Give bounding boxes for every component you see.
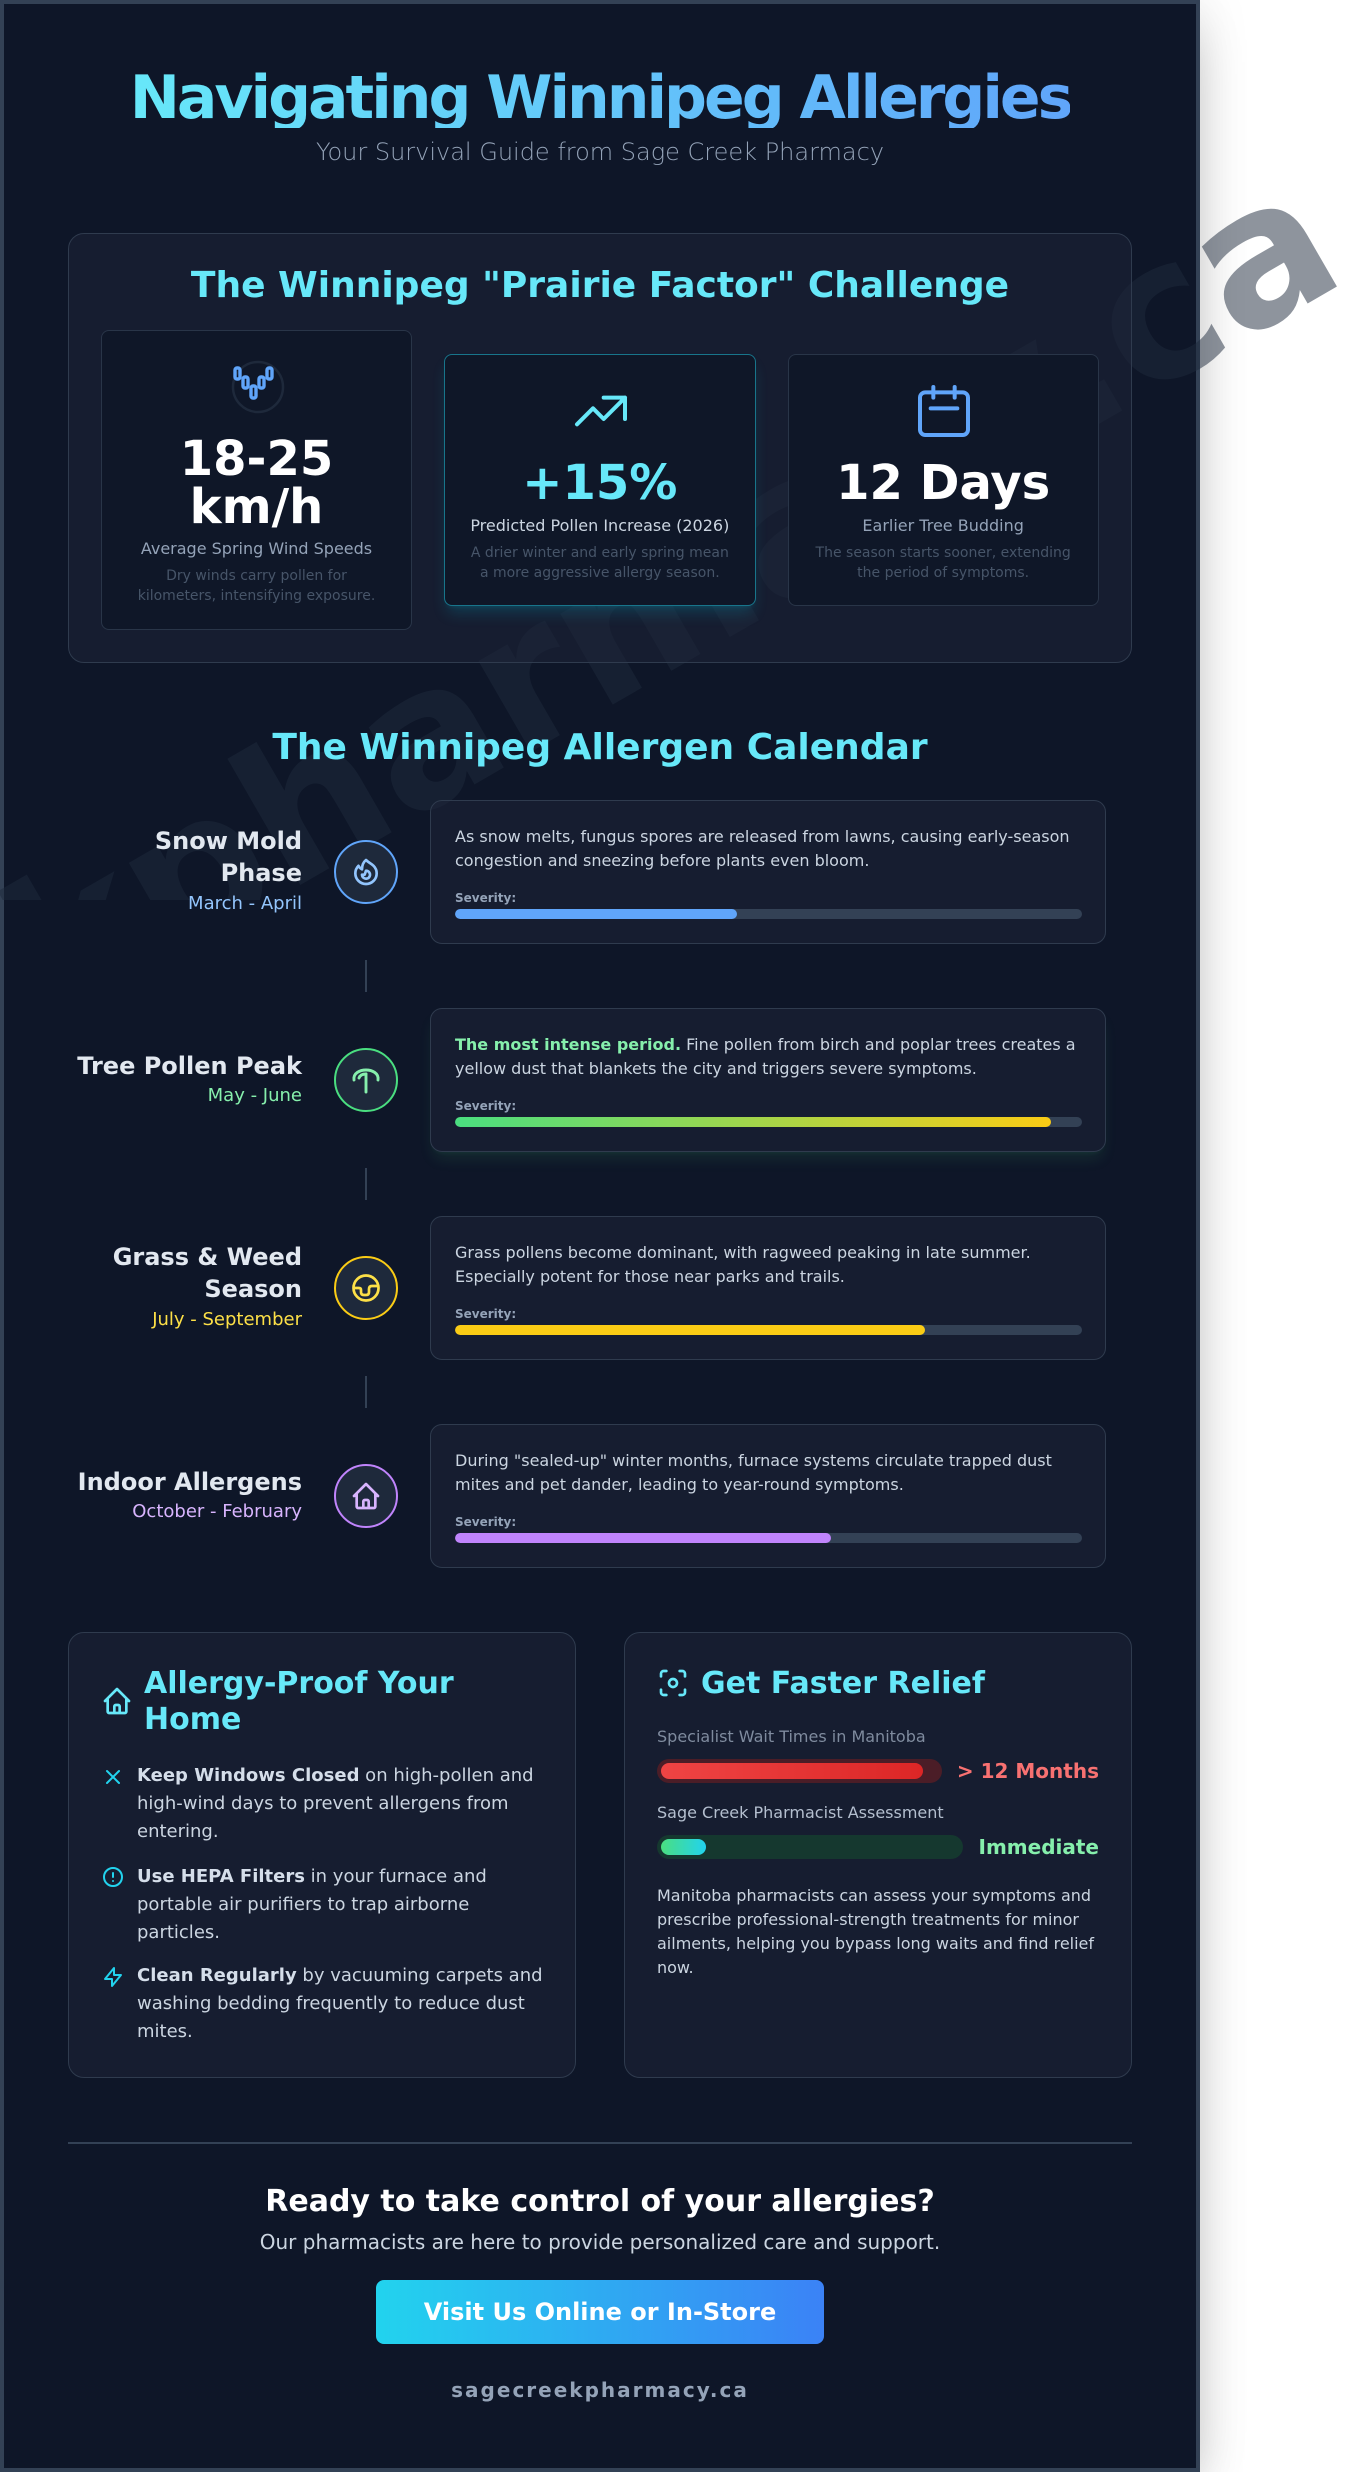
subtitle: Your Survival Guide from Sage Creek Pharmacy [316,138,884,166]
timeline row label: snow mold: March - April [188,893,302,914]
bar: pharmacist [657,1835,963,1859]
stat description [471,545,729,581]
call to action subtext: Our pharmacists are here to provide personalized care and support. [260,2230,940,2254]
stat value [180,431,333,535]
relief paragraph: ailments, helping you bypass long waits and find relief [657,1934,1094,1953]
panel heading [144,1666,454,1737]
panel heading: Allergy-Proof Your [144,1666,454,1701]
description: indoor: mites and pet dander, leading to year-round symptoms. [455,1475,904,1494]
website url: sagecreekpharmacy.ca [451,2378,749,2402]
panel heading: Get Faster Relief [701,1666,985,1701]
description: grass and weed: Grass pollens become dominant, with ragweed peaking in late summer. [455,1243,1031,1262]
stat description [816,545,1071,581]
stat description: The season starts sooner, extending [816,545,1071,561]
tip: windows: entering. [137,1821,219,1842]
icon: home [334,1464,398,1528]
stat value: km/h [190,479,323,535]
panel: allergy-proof home [68,1632,576,2078]
timeline row label: indoor [78,1468,302,1522]
label: specialist wait: Specialist Wait Times in Manitoba [657,1727,926,1746]
timeline card: snow mold [430,800,1106,944]
timeline row label: snow mold: Phase [221,859,302,887]
button: Visit Us Online or In-Store [424,2298,776,2326]
stat label: Predicted Pollen Increase (2026) [470,516,729,535]
description: indoor: During "sealed-up" winter months, furnace systems circulate trapped dust [455,1451,1052,1470]
icon: fire [334,840,398,904]
stat description: kilometers, intensifying exposure. [138,588,375,604]
stat description [138,568,375,604]
heading: allergen calendar: The Winnipeg Allergen Calendar [272,727,928,768]
connector [365,1376,367,1408]
stat value: 18-25 [180,431,333,487]
stat description: the period of symptoms. [857,565,1029,581]
timeline card: tree pollen [430,1008,1106,1152]
stat description: Dry winds carry pollen for [166,568,347,584]
timeline row label: snow mold: Snow Mold [155,827,302,855]
timeline row label: tree pollen: Tree Pollen Peak [77,1052,302,1080]
description: grass and weed: Especially potent for those near parks and trails. [455,1267,845,1286]
button [376,2280,824,2344]
connector [365,1168,367,1200]
timeline card: grass and weed [430,1216,1106,1360]
severity label: Severity: [455,1099,516,1113]
relief paragraph [657,1886,1094,1977]
severity bar: tree pollen [455,1117,1082,1127]
description: tree pollen: The most intense period. Fine pollen from birch and poplar trees creates a [455,1035,1076,1054]
stat value: 12 Days [836,455,1050,511]
severity label: Severity: [455,891,516,905]
connector [365,960,367,992]
icon: wind [232,360,284,414]
tip: cleaning: washing bedding frequently to reduce dust [137,1993,525,2014]
panel heading: Home [144,1702,241,1737]
relief paragraph: now. [657,1958,694,1977]
icon: x [106,1770,120,1784]
icon: tree [334,1048,398,1112]
severity label: Severity: [455,1307,516,1321]
stat card: earlier budding [788,354,1099,606]
panel: prairie factor challenge [68,233,1132,663]
stat label: Average Spring Wind Speeds [141,539,372,558]
timeline row label: snow mold [155,827,302,914]
tip: cleaning [137,1965,543,2042]
tip: filters: Use HEPA Filters in your furnace and [137,1866,487,1887]
stat label: Earlier Tree Budding [862,516,1024,535]
description: indoor [455,1451,1052,1494]
title: Navigating Winnipeg Allergies [130,63,1070,133]
relief paragraph: prescribe professional-strength treatments for minor [657,1910,1079,1929]
value: immediate: Immediate [979,1835,1099,1859]
icon: trending up [574,396,628,426]
tip: windows: high-wind days to prevent allergens from [137,1793,509,1814]
tip: filters [137,1866,487,1943]
bar: specialist wait [657,1759,942,1783]
tip: windows [137,1765,534,1842]
stat card: wind speeds [101,330,412,630]
description: snow mold [455,827,1070,870]
tip: filters: particles. [137,1922,220,1943]
tip: windows: Keep Windows Closed on high-pollen and [137,1765,534,1786]
timeline row label: tree pollen [77,1052,302,1106]
value: 12 months: > 12 Months [957,1759,1099,1783]
icon: grass [334,1256,398,1320]
tip: cleaning: mites. [137,2021,193,2042]
stat description: A drier winter and early spring mean [471,545,729,561]
label: pharmacist: Sage Creek Pharmacist Assessment [657,1803,944,1822]
timeline row label: grass and weed: July - September [152,1309,302,1330]
description: tree pollen: yellow dust that blankets the city and triggers severe symptoms. [455,1059,977,1078]
timeline row label: indoor: Indoor Allergens [78,1468,302,1496]
severity bar: indoor [455,1533,1082,1543]
description: grass and weed [455,1243,1031,1286]
severity label: Severity: [455,1515,516,1529]
severity bar: snow mold [455,909,1082,919]
call to action heading: Ready to take control of your allergies? [265,2184,935,2219]
description: snow mold: congestion and sneezing before plants even bloom. [455,851,869,870]
timeline row label: grass and weed: Season [204,1275,302,1303]
description: tree pollen [455,1035,1076,1078]
relief paragraph: Manitoba pharmacists can assess your symptoms and [657,1886,1091,1905]
icon: scan [660,1670,686,1696]
icon: home [104,1688,130,1714]
heading: prairie factor: The Winnipeg "Prairie Factor" Challenge [191,265,1009,306]
icon: calendar [918,385,970,437]
severity bar: grass and weed [455,1325,1082,1335]
tip: cleaning: Clean Regularly by vacuuming carpets and [137,1965,543,1986]
panel: faster relief [624,1632,1132,2078]
timeline row label: indoor: October - February [132,1501,302,1522]
tip: filters: portable air purifiers to trap airborne [137,1894,469,1915]
stat value: +15% [522,455,677,511]
description: snow mold: As snow melts, fungus spores are released from lawns, causing early-season [455,827,1070,846]
icon: lightning [104,1967,122,1987]
timeline row label: tree pollen: May - June [208,1085,302,1106]
timeline row label: grass and weed: Grass & Weed [113,1243,302,1271]
stat card: pollen increase [444,354,756,606]
stat description: a more aggressive allergy season. [480,565,720,581]
icon: exclamation [103,1867,123,1887]
timeline card: indoor [430,1424,1106,1568]
timeline row label: grass and weed [113,1243,302,1330]
